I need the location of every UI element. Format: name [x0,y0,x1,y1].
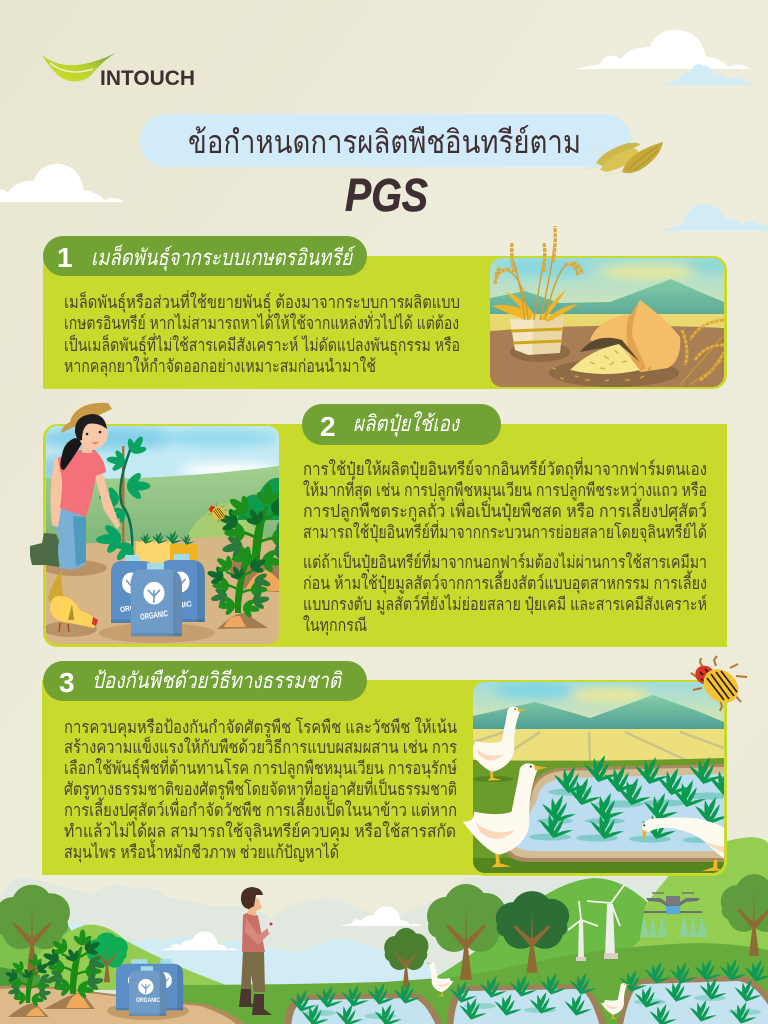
text block 3: การเลี้ยงปศุสัตว์เพื่อกำจัดวัชพืช การเลี้ยงเป็ดในนาข้าว แต่หาก [64,797,457,821]
text block 2 [303,457,707,636]
tab 1 heading: เมล็ดพันธุ์จากระบบเกษตรอินทรีย์ [91,244,356,271]
cloud: top right white [576,30,751,69]
logo [42,52,195,90]
tab 1 heading [43,236,367,276]
text block 2: การปลูกพืชตระกูลถั่ว เพื่อเป็นปุ๋ยพืชสด หรือ การเลี้ยงปศุสัตว์ [303,498,707,522]
cloud: top right blue [664,64,756,85]
panel 2: compost [30,403,727,647]
organic bags in scene [107,959,189,1020]
tab 3 heading [43,661,367,701]
organic bags: ORGANIC [139,608,169,622]
panel 1: seeds [43,226,735,389]
text block 3: ศัตรูทางธรรมชาติของศัตรูพืชโดยจัดหาที่อยู่อาศัยที่เป็นธรรมชาติ [64,777,457,800]
organic bags in scene: ORGANIC [136,997,160,1004]
text block 3: สร้างความแข็งแรงให้กับพืชด้วยวิธีการแบบผสมผสาน เช่น การ [64,736,457,757]
text block 3 [64,717,457,863]
drone with spray [640,893,707,937]
trees [0,874,768,980]
text block 1: เกษตรอินทรีย์ หากไม่สามารถหาได้ให้ใช้จากแหล่งทั่วไปได้ แต่ต้อง [64,311,459,333]
rice bundle in pot [492,226,582,322]
logo: INTOUCH [100,67,195,90]
text block 3: การควบคุมหรือป้องกันกำจัดศัตรูพืช โรคพืช และวัชพืช ให้เน้น [64,717,457,738]
organic bags: ORG [119,603,136,614]
woman [30,403,120,569]
mounds and plants [3,929,108,1017]
text block 1: เป็นเมล็ดพันธุ์ที่ไม่ใช้สารเคมีสังเคราะห์ ไม่ดัดแปลงพันธุกรรม หรือ [64,333,460,356]
hen [48,570,98,632]
wind turbines [568,884,625,961]
cloud: right blue [657,204,768,231]
tab 1 heading: 1 [57,242,73,273]
text block 3: ทำแล้วไม่ได้ผล สามารถใช้จุลินทรีย์ควบคุม หรือใช้สารสกัด [64,821,456,842]
paddy fields [284,976,768,1024]
text block 2: การใช้ปุ๋ยให้ผลิตปุ๋ยอินทรีย์จากอินทรีย์วัตถุที่มาจากฟาร์มตนเอง [303,457,707,480]
illustration: rice and seed sack [490,226,735,387]
icon: rice grains [582,142,663,175]
tab 3 heading: ป้องกันพืชด้วยวิธีทางธรรมชาติ [92,668,343,693]
bottom farm scene [0,837,768,1024]
panel 3: natural pest control [42,656,747,876]
text block 1 [64,290,460,377]
heading: PGS: PGS [345,169,428,221]
tab 2 heading [302,404,501,445]
text block 1: หากคลุกยาให้กำจัดออกอย่างเหมาะสมก่อนนำมาใช้ [64,356,376,377]
illustration: woman farmer with organic fertilizer [30,403,301,644]
icon: beetle [691,656,747,711]
text block 3: เลือกใช้พันธุ์พืชที่ต้านทานโรค การปลูกพืชหมุนเวียน การอนุรักษ์ [64,756,457,779]
cloud: left white [0,164,124,202]
clouds in scene [160,906,421,950]
text block 2: ในทุกกรณี [303,615,367,636]
tab 2 heading: 2 [320,411,336,442]
text block 3: สมุนไพร หรือน้ำหมักชีวภาพ ช่วยแก้ปัญหาได้ [64,839,339,863]
title pill: ข้อกำหนดการผลิตพืชอินทรีย์ตาม [188,124,581,160]
farmer with remote [239,887,277,1015]
illustration: ducks in rice paddy [463,682,743,873]
text block 1: เมล็ดพันธุ์หรือส่วนที่ใช้ขยายพันธุ์ ต้องมาจากระบบการผลิตแบบ [64,290,460,313]
organic bags: NIC [177,599,193,610]
tab 3 heading: 3 [59,667,75,698]
ducks in scene [426,962,630,1019]
organic bags [111,554,205,636]
stake and vine [95,431,152,568]
tab 2 heading: ผลิตปุ๋ยใช้เอง [353,411,461,437]
title pill [140,114,631,167]
